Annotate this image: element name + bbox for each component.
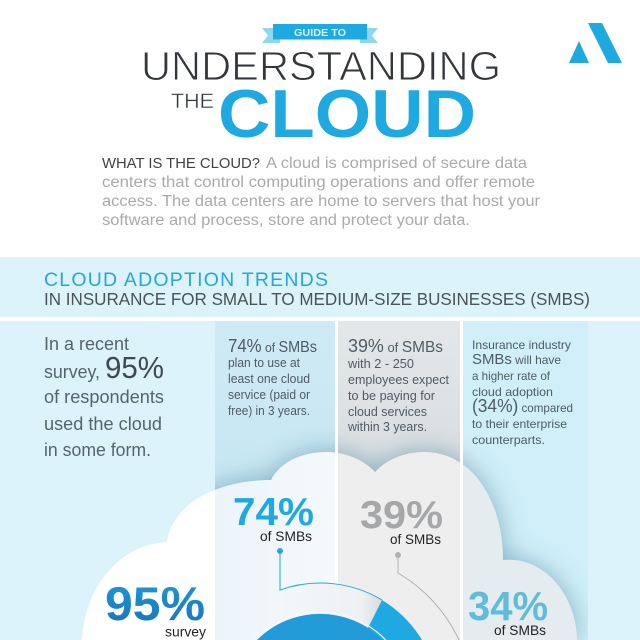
stat: 74 percent: 74%: [233, 491, 314, 534]
column text: 74 percent of SMBs: service (paid or: [228, 387, 311, 402]
column text: insurance industry SMBs: SMBs will have: [472, 351, 561, 368]
column text: insurance industry SMBs: (34%) compared: [472, 396, 573, 416]
column text: 74 percent of SMBs: least one cloud: [228, 371, 310, 386]
panel: cloud adoption trends header: CLOUD ADOPTION TRENDS: [44, 269, 328, 291]
panel: statistics background: [0, 321, 640, 640]
intro paragraph: what is the cloud: access. The data centers are home to servers that host your: [102, 193, 540, 210]
column text: insurance industry SMBs: a higher rate of: [472, 369, 551, 383]
intro paragraph: what is the cloud: WHAT IS THE CLOUD?: [102, 156, 260, 172]
column text: insurance industry SMBs: to their enterprise: [472, 417, 567, 431]
column text: 74 percent of SMBs: [228, 336, 317, 418]
connector: 74 percent: [278, 548, 382, 600]
title: THE: [171, 90, 214, 113]
column text: insurance industry SMBs: [472, 338, 573, 447]
donut chart: [254, 583, 422, 640]
stat: 34 percent: of SMBs: [494, 622, 546, 638]
intro paragraph: what is the cloud: centers that control computing operations and offer remote: [102, 174, 535, 191]
column text: insurance industry SMBs: counterparts.: [472, 433, 545, 447]
stat: 39 percent: of SMBs: [390, 531, 441, 547]
intro paragraph: what is the cloud: software and process, store and protect your data.: [102, 212, 470, 229]
column text: 39 percent of SMBs: to be paying for: [348, 388, 436, 403]
title: CLOUD: [218, 76, 476, 152]
stat: 95 percent: 95%: [105, 577, 205, 630]
column text: 39 percent of SMBs: employees expect: [348, 372, 449, 387]
panel: survey text: In a recent: [44, 334, 129, 354]
column text: 39 percent of SMBs: cloud services: [348, 404, 427, 419]
intro paragraph: what is the cloud: [102, 155, 540, 229]
column text: 39 percent of SMBs: with 2 - 250: [347, 356, 414, 371]
panel: cloud adoption trends header: [0, 257, 640, 317]
stat: 39 percent: 39%: [360, 494, 443, 537]
panel: cloud adoption trends header: IN INSURANCE FOR SMALL TO MEDIUM-SIZE BUSINESSES (SMBS): [44, 289, 590, 309]
column text: 74 percent of SMBs: plan to use at: [228, 355, 300, 370]
guide to ribbon banner: [262, 24, 378, 43]
title: [141, 43, 501, 152]
panel: column 39 percent: [338, 321, 460, 640]
panel: column 34 percent: [463, 321, 588, 640]
column text: 74 percent of SMBs: 74% of SMBs: [228, 336, 317, 356]
panel: survey text: [44, 334, 164, 460]
stat: 34 percent: 34%: [468, 583, 548, 629]
cloud shape: [82, 452, 577, 640]
panel: survey text: used the cloud: [44, 414, 162, 434]
stat: 74 percent: of SMBs: [260, 528, 312, 544]
stat: 95 percent: survey: [165, 624, 206, 640]
panel: column white dividers: [335, 321, 463, 640]
column text: 39 percent of SMBs: within 3 years.: [347, 419, 427, 434]
title: UNDERSTANDING: [141, 43, 501, 89]
column text: 74 percent of SMBs: free) in 3 years.: [228, 403, 310, 418]
panel: survey text: survey,: [44, 362, 100, 382]
panel: survey text: of respondents: [44, 387, 164, 407]
panel: survey text: in some form.: [44, 440, 151, 460]
panel: survey text: 95%: [105, 350, 164, 385]
logo icon: [569, 23, 622, 63]
cloud shadow: [215, 436, 588, 640]
guide to ribbon banner: GUIDE TO: [294, 27, 346, 39]
column text: 39 percent of SMBs: [347, 336, 449, 434]
panel: column 74 percent: [215, 321, 335, 640]
connector: 39 percent: [396, 552, 459, 640]
column text: insurance industry SMBs: Insurance industry: [472, 338, 571, 352]
column text: 39 percent of SMBs: 39% of SMBs: [348, 336, 443, 356]
column text: insurance industry SMBs: cloud adoption: [472, 385, 553, 399]
intro paragraph: what is the cloud: A cloud is comprised of secure data: [266, 155, 527, 172]
